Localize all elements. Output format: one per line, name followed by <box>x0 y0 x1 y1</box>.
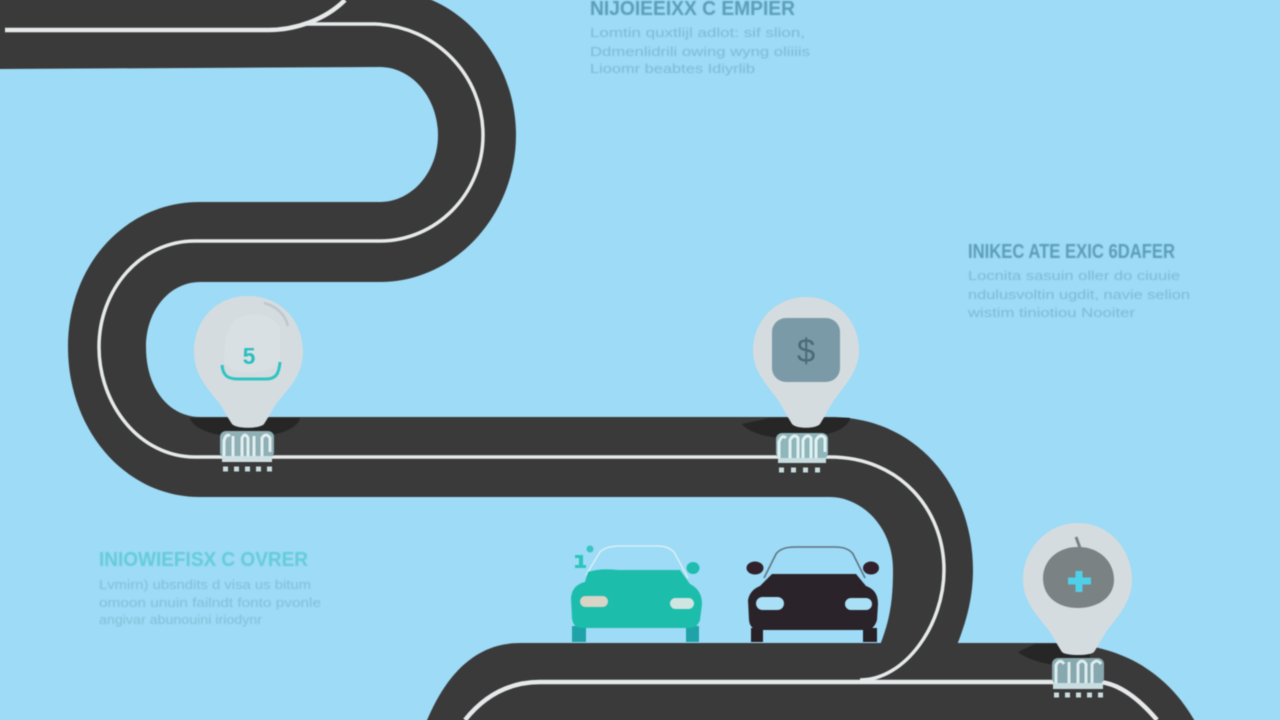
text block: left <box>99 549 321 627</box>
black car left mirror <box>746 562 764 574</box>
teal car wheels <box>572 626 699 642</box>
lane line: serpentine <box>99 24 944 680</box>
pin 1 icon number: 5 <box>243 343 256 369</box>
body: left line 2: omoon unuin failndt fonto pvonle <box>99 595 321 610</box>
pin 2 icon dollar: $ <box>797 332 815 369</box>
road: lower segment <box>425 643 1197 720</box>
pin marker 1 <box>190 296 303 437</box>
black car <box>746 547 879 642</box>
black car body <box>748 574 878 630</box>
body: top line 1: Lomtin quxtlijl adlot: sif slion, <box>590 25 805 40</box>
body: right line 1: Locnita sasuin oller do ciuuie <box>968 268 1180 283</box>
pin 3 shadow <box>1018 644 1090 668</box>
teal car <box>571 546 702 642</box>
teal car left headlight <box>580 596 608 607</box>
road: upper serpentine segment <box>0 0 973 645</box>
text block: right <box>967 241 1190 320</box>
pin 3 icon stem <box>1076 537 1080 548</box>
body: top line 3: Lioomr beabtes Idiyrlib <box>590 61 755 76</box>
pin 1 icon tray <box>222 362 280 379</box>
pin 1 highlight <box>264 303 288 326</box>
black car wheels <box>751 628 877 642</box>
black car windshield outline <box>764 547 865 578</box>
pin 1 body <box>194 296 303 428</box>
lane line: lower <box>465 682 1157 720</box>
heading: right: INIKEC ATE EXIC 6DAFER <box>968 241 1175 263</box>
body: right line 2: ndulusvoltin ugdit, navie selion <box>968 287 1190 302</box>
black car right headlight <box>845 598 872 610</box>
pin 1 shadow <box>190 418 300 437</box>
black car left headlight <box>756 597 784 610</box>
pin 2 shadow <box>742 418 850 438</box>
body: left line 3: angivar abunouini iriodynr <box>99 612 263 627</box>
pin 1 base cluster <box>220 431 274 469</box>
pin 2 icon tile <box>772 318 840 382</box>
teal car windshield outline <box>586 546 688 578</box>
pin marker 2 <box>742 297 859 438</box>
text block: top <box>590 0 811 76</box>
lane line: main <box>5 0 345 30</box>
pin 3 base cluster <box>1052 658 1104 695</box>
pin 3 body <box>1023 523 1132 655</box>
teal car mirror <box>686 562 700 574</box>
pin 2 body <box>753 297 859 428</box>
pin 2 base cluster <box>776 433 828 470</box>
body: right line 3: wistim tiniotiou Nooiter <box>967 305 1136 320</box>
heading: left: INIOWIEFISX C OVRER <box>99 549 309 571</box>
teal car spark icon <box>575 555 586 568</box>
teal car body <box>571 569 702 628</box>
pin 1 inner panel <box>224 314 280 372</box>
pin marker 3 <box>1018 523 1132 668</box>
pin 3 icon plus <box>1068 571 1091 592</box>
teal car spark dot <box>586 546 594 552</box>
body: left line 1: Lvmirn) ubsndits d visa us bitum <box>99 577 311 592</box>
teal car right headlight <box>670 598 694 609</box>
body: top line 2: Ddmenlidrili owing wyng oliiiis <box>590 44 811 59</box>
black car right mirror <box>863 562 879 574</box>
pin 3 icon blob <box>1043 547 1114 608</box>
